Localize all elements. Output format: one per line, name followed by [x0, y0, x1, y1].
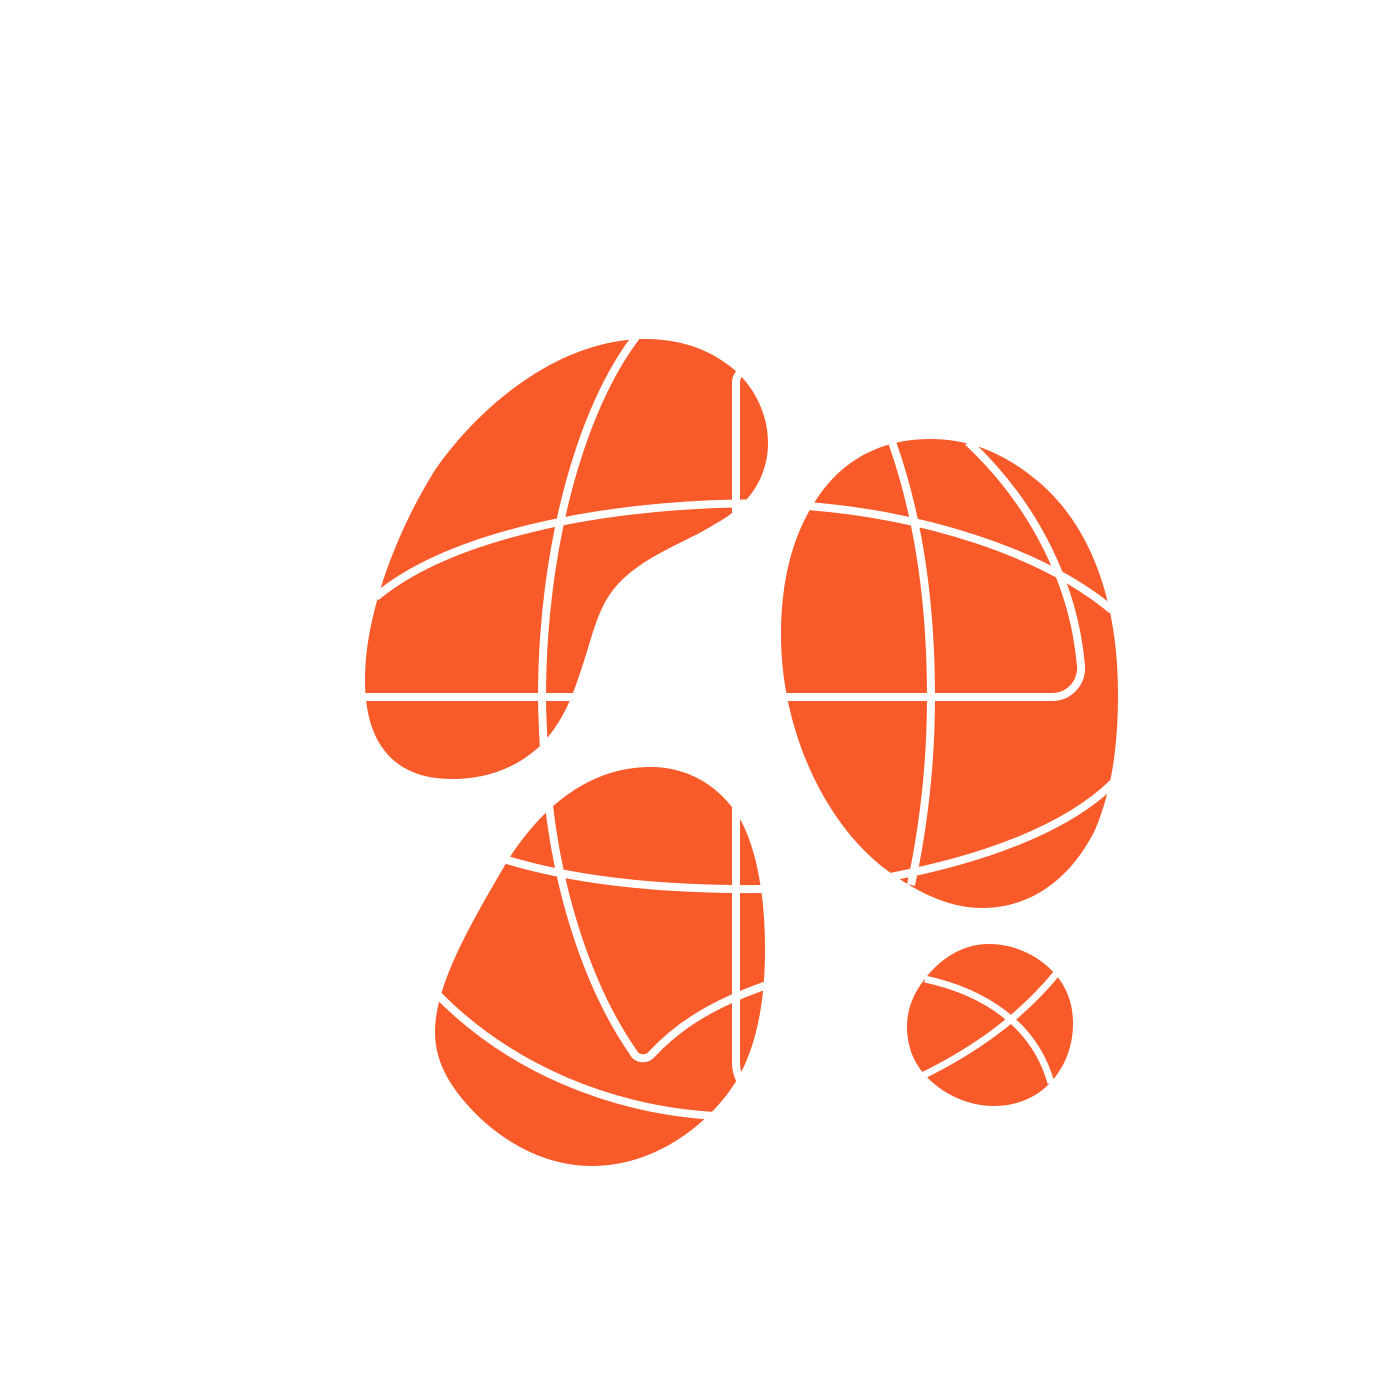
pebble: top left — [360, 337, 768, 779]
pebble: small bottom right — [907, 944, 1073, 1106]
pebble: bottom left — [435, 767, 767, 1166]
pebble: top right — [780, 439, 1118, 908]
